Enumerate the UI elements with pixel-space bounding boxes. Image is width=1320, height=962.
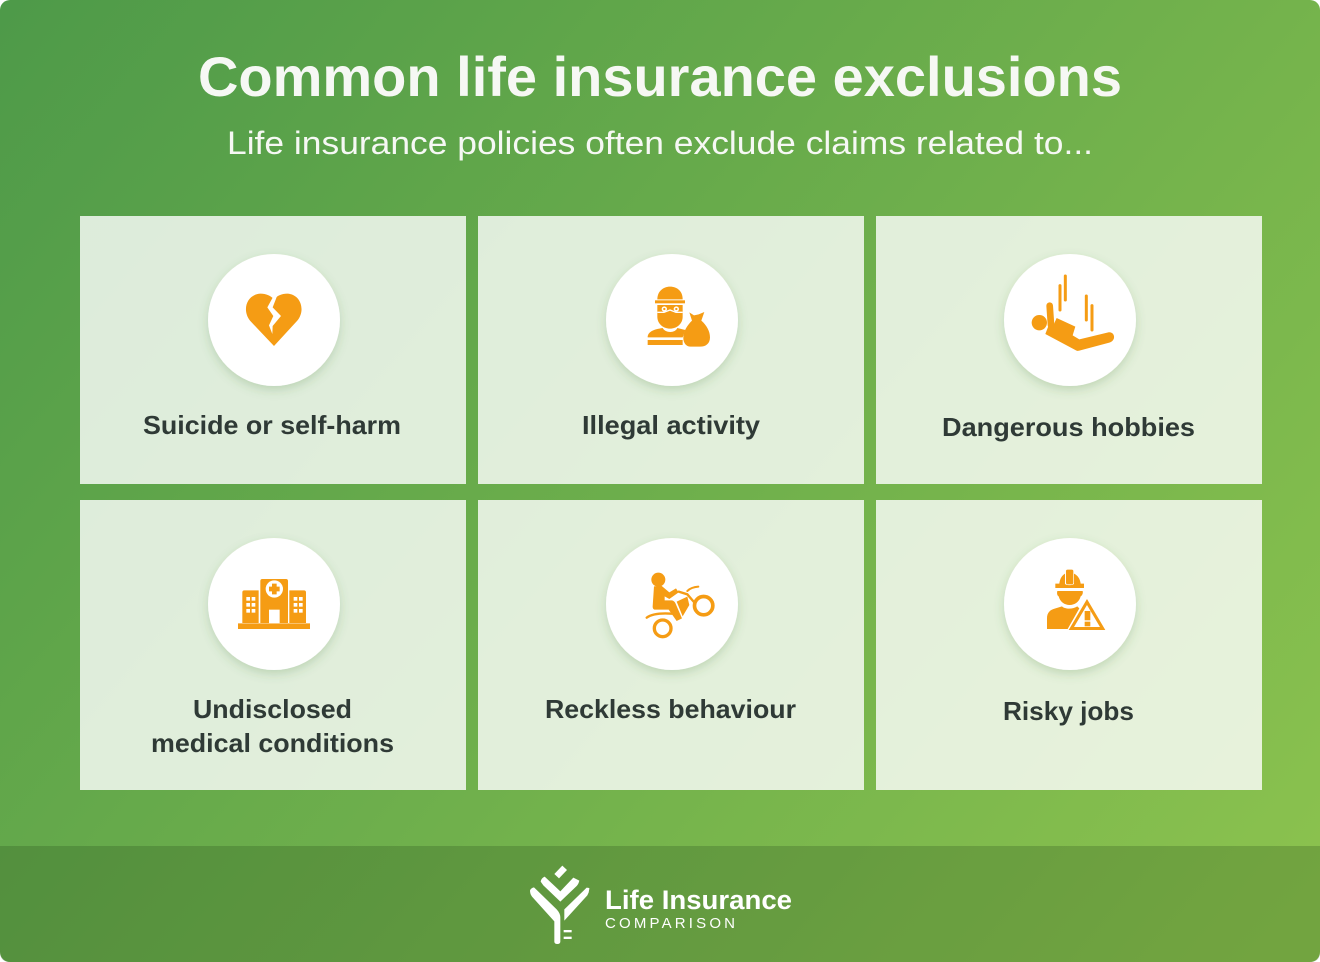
label: illegal activity: Illegal activity	[582, 410, 761, 440]
logo	[530, 866, 792, 944]
logo subline: COMPARISON	[605, 915, 735, 932]
label: reckless behaviour: Reckless behaviour	[545, 694, 796, 724]
icon: hospital	[208, 538, 340, 670]
icon: motorbike wheelie	[606, 538, 738, 670]
subtitle: Life insurance policies often exclude claims related to...	[227, 125, 1093, 161]
label: undisclosed medical conditions: medical conditions	[151, 728, 394, 758]
panel: undisclosed medical conditions	[80, 500, 466, 790]
label: undisclosed medical conditions	[151, 694, 394, 758]
panel: reckless behaviour	[478, 500, 864, 790]
icon: broken heart	[208, 254, 340, 386]
icon: falling person	[1004, 254, 1136, 386]
label: dangerous hobbies: Dangerous hobbies	[942, 412, 1195, 442]
title: Common life insurance exclusions	[198, 45, 1122, 108]
label: risky jobs: Risky jobs	[1003, 696, 1134, 726]
panel: illegal activity	[478, 216, 864, 484]
icon: robber with money bag	[606, 254, 738, 386]
label: suicide: Suicide or self-harm	[143, 410, 401, 440]
panel: dangerous hobbies	[876, 216, 1262, 484]
icon: worker and warning sign	[1004, 538, 1136, 670]
panel: suicide or self-harm	[80, 216, 466, 484]
panel: risky jobs	[876, 500, 1262, 790]
logo mark	[530, 866, 589, 944]
footer band	[0, 846, 1320, 962]
label: undisclosed medical conditions: Undisclosed	[193, 694, 352, 724]
logo wordmark: Life Insurance	[605, 885, 792, 915]
